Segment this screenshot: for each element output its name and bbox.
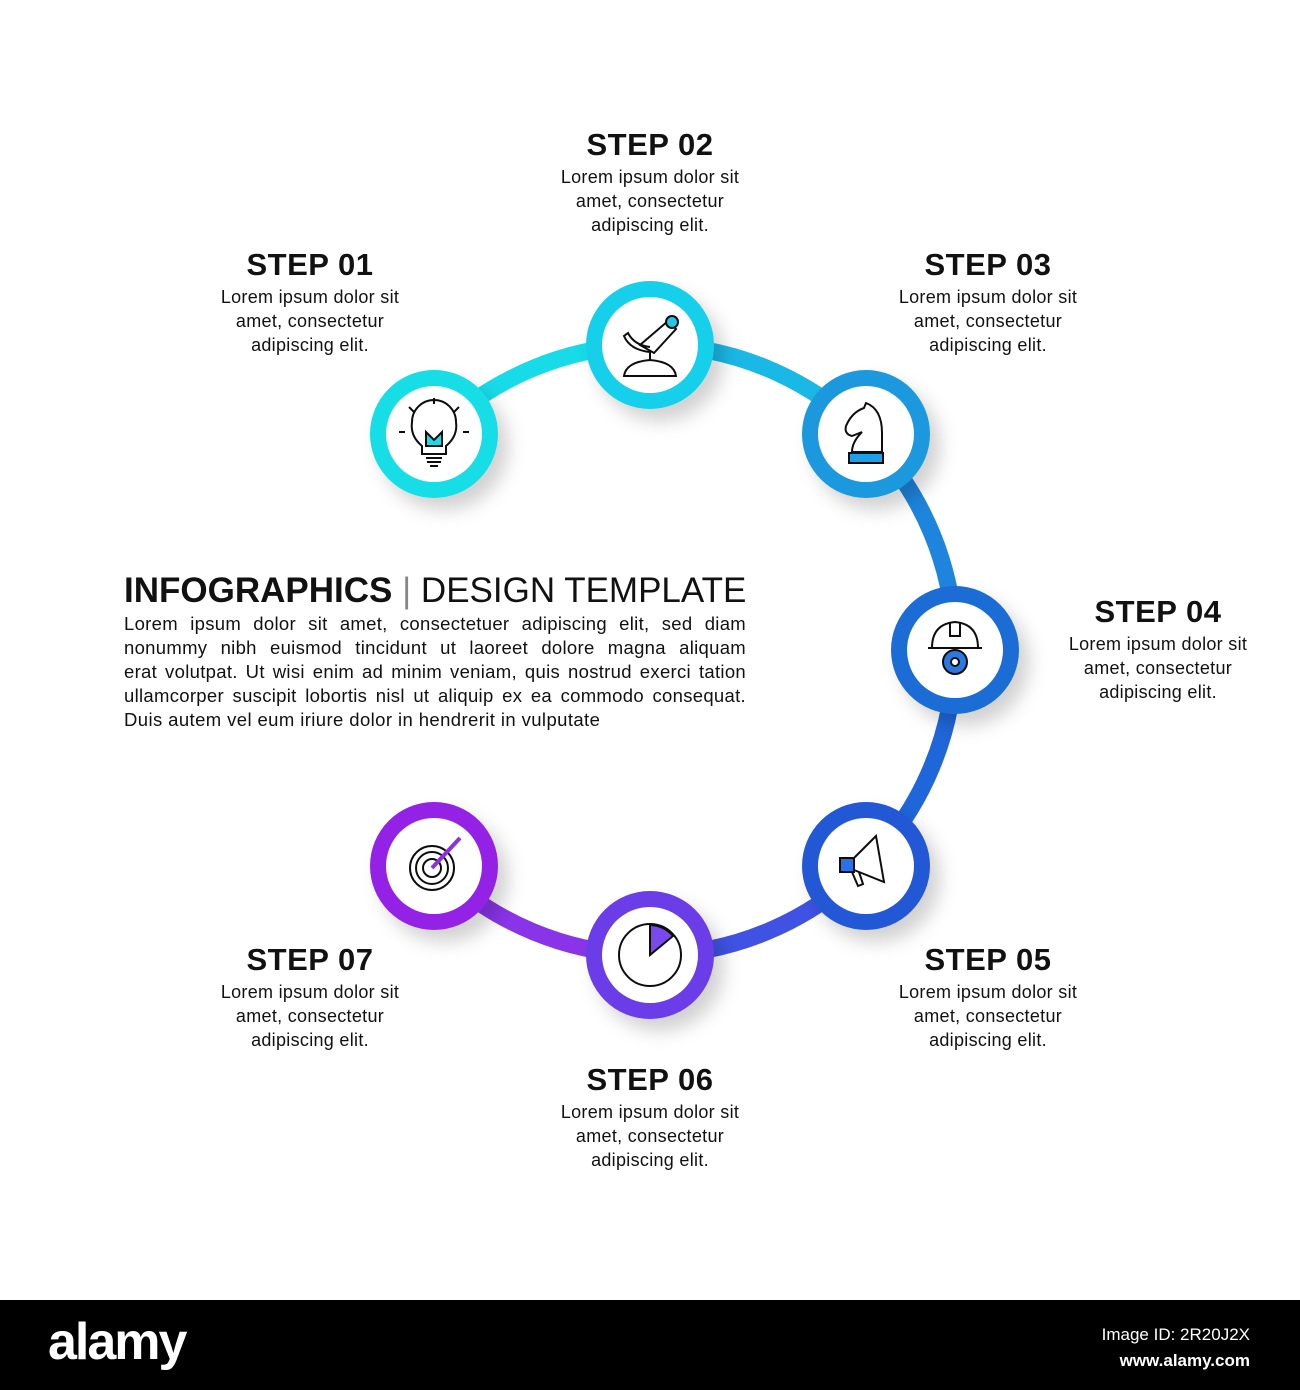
step 05 text: adipiscing elit.: [929, 1030, 1047, 1050]
image id: www.alamy.com: [1120, 1351, 1250, 1370]
footer bar: [0, 1300, 1300, 1390]
step 04 text: Lorem ipsum dolor sit: [1069, 634, 1247, 654]
step 02 text: [561, 127, 739, 235]
step 02 text: STEP 02: [586, 127, 714, 162]
step 05 text: [899, 942, 1077, 1050]
step 01 text: Lorem ipsum dolor sit: [221, 287, 399, 307]
icon: microscope: [624, 316, 678, 376]
step 02 text: amet, consectetur: [576, 191, 724, 211]
step 05 text: Lorem ipsum dolor sit: [899, 982, 1077, 1002]
step 04 text: adipiscing elit.: [1099, 682, 1217, 702]
node: step 04: [891, 586, 1019, 714]
step 01 text: adipiscing elit.: [251, 335, 369, 355]
icon: megaphone: [840, 836, 884, 886]
step 03 text: [899, 247, 1077, 355]
node: step 06: [586, 891, 714, 1019]
image id: [1102, 1325, 1250, 1370]
step 06 text: STEP 06: [586, 1062, 714, 1097]
step 02 text: Lorem ipsum dolor sit: [561, 167, 739, 187]
step 04 text: STEP 04: [1094, 594, 1222, 629]
description: Lorem ipsum dolor sit amet, consectetuer adipiscing elit, sed diam: [124, 613, 746, 634]
step 01 text: STEP 01: [246, 247, 374, 282]
step 06 text: adipiscing elit.: [591, 1150, 709, 1170]
node: step 01: [370, 370, 498, 498]
icon: knight: [846, 403, 883, 463]
node: step 03: [802, 370, 930, 498]
step 03 text: adipiscing elit.: [929, 335, 1047, 355]
image id: Image ID: 2R20J2X: [1102, 1325, 1250, 1344]
step 01 text: amet, consectetur: [236, 311, 384, 331]
step 07 text: adipiscing elit.: [251, 1030, 369, 1050]
step 04 text: [1069, 594, 1247, 702]
step 07 text: amet, consectetur: [236, 1006, 384, 1026]
description: ullamcorper suscipit lobortis nisl ut aliquip ex ea commodo consequat.: [124, 685, 746, 706]
description: [124, 613, 746, 730]
node: step 07: [370, 802, 498, 930]
step 05 text: STEP 05: [924, 942, 1052, 977]
step 01 text: [221, 247, 399, 355]
node: step 05: [802, 802, 930, 930]
step 07 text: [221, 942, 399, 1050]
description: Duis autem vel eum iriure dolor in hendrerit in vulputate: [124, 709, 600, 730]
step 04 text: amet, consectetur: [1084, 658, 1232, 678]
description: nonummy nibh euismod tincidunt ut laoreet dolore magna aliquam: [124, 637, 746, 658]
step 07 text: Lorem ipsum dolor sit: [221, 982, 399, 1002]
step 02 text: adipiscing elit.: [591, 215, 709, 235]
icon: target: [410, 838, 460, 890]
step 03 text: STEP 03: [924, 247, 1052, 282]
logo: alamy: [48, 1313, 185, 1371]
icon: clock: [619, 924, 681, 986]
step 05 text: amet, consectetur: [914, 1006, 1062, 1026]
title: INFOGRAPHICS | DESIGN TEMPLATE: [124, 571, 746, 610]
step 03 text: Lorem ipsum dolor sit: [899, 287, 1077, 307]
icon: bulb: [399, 398, 469, 466]
arc segments: [434, 345, 955, 955]
node: step 02: [586, 281, 714, 409]
center title block: [124, 571, 746, 730]
description: erat volutpat. Ut wisi enim ad minim veniam, quis nostrud exerci tation: [124, 661, 746, 682]
step 06 text: [561, 1062, 739, 1170]
icon: helmet gear: [928, 622, 982, 674]
step 06 text: Lorem ipsum dolor sit: [561, 1102, 739, 1122]
step 07 text: STEP 07: [246, 942, 374, 977]
step 03 text: amet, consectetur: [914, 311, 1062, 331]
step 06 text: amet, consectetur: [576, 1126, 724, 1146]
